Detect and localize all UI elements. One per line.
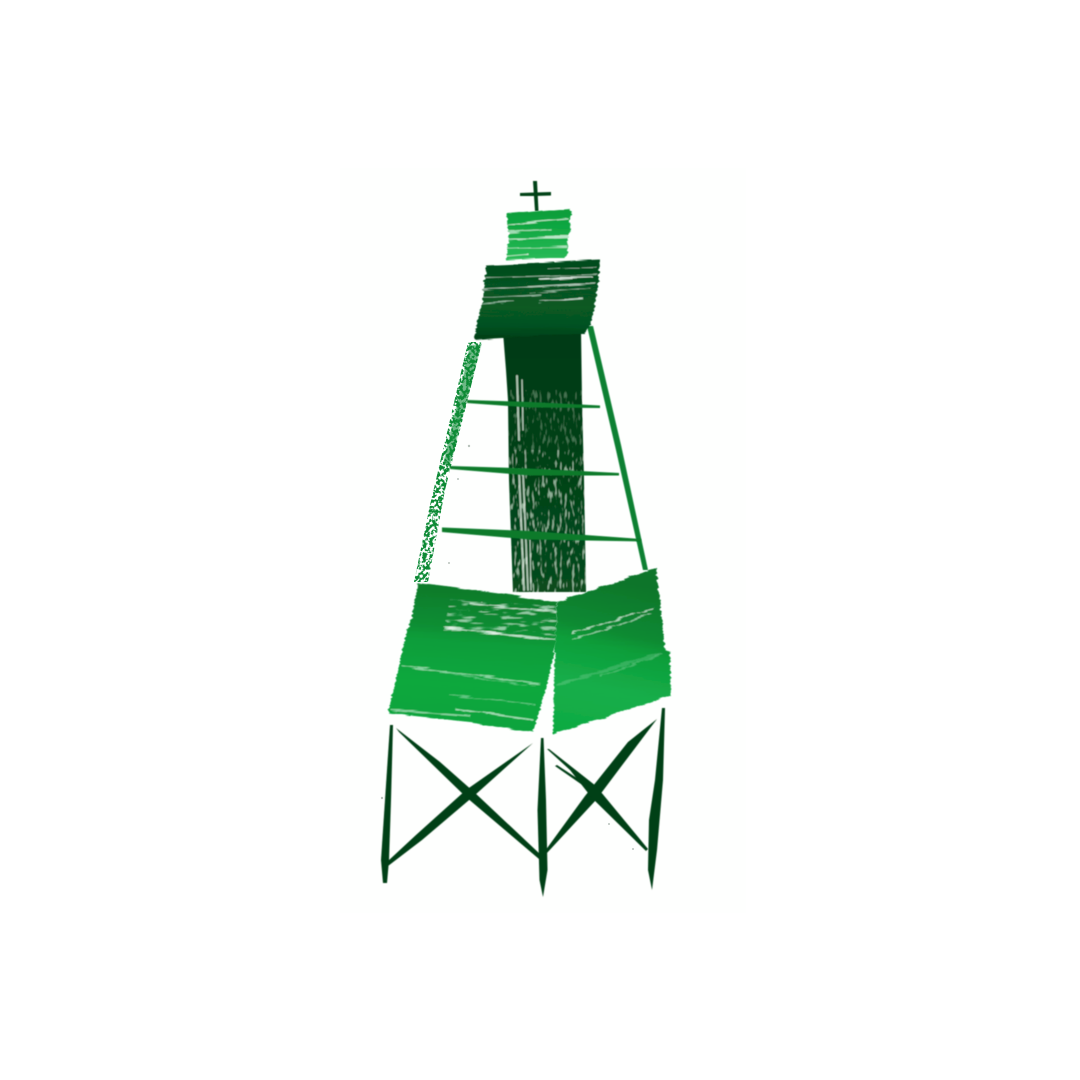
leg: middle [538, 738, 548, 897]
dark roof platform [474, 260, 600, 339]
leg: right [648, 708, 665, 890]
brace: second X extra stroke [555, 765, 592, 791]
base legs with cross bracing [381, 708, 665, 897]
right strut [587, 326, 648, 570]
brace: second X ascending [545, 719, 657, 854]
brace: second X descending [547, 749, 648, 851]
base panel: left face [388, 583, 557, 732]
background: paper sheet [340, 168, 746, 913]
top lantern box [505, 208, 571, 260]
left strut: speckled dry brush [414, 342, 482, 582]
brace: first X descending [396, 728, 541, 859]
icon: cross on top of the beacon [520, 181, 551, 211]
paint specks [381, 445, 634, 850]
ladder rungs [442, 400, 641, 542]
base panel: right face [553, 568, 671, 734]
central column [503, 330, 586, 592]
brace: first X ascending [388, 743, 533, 866]
leg: left [381, 725, 393, 883]
